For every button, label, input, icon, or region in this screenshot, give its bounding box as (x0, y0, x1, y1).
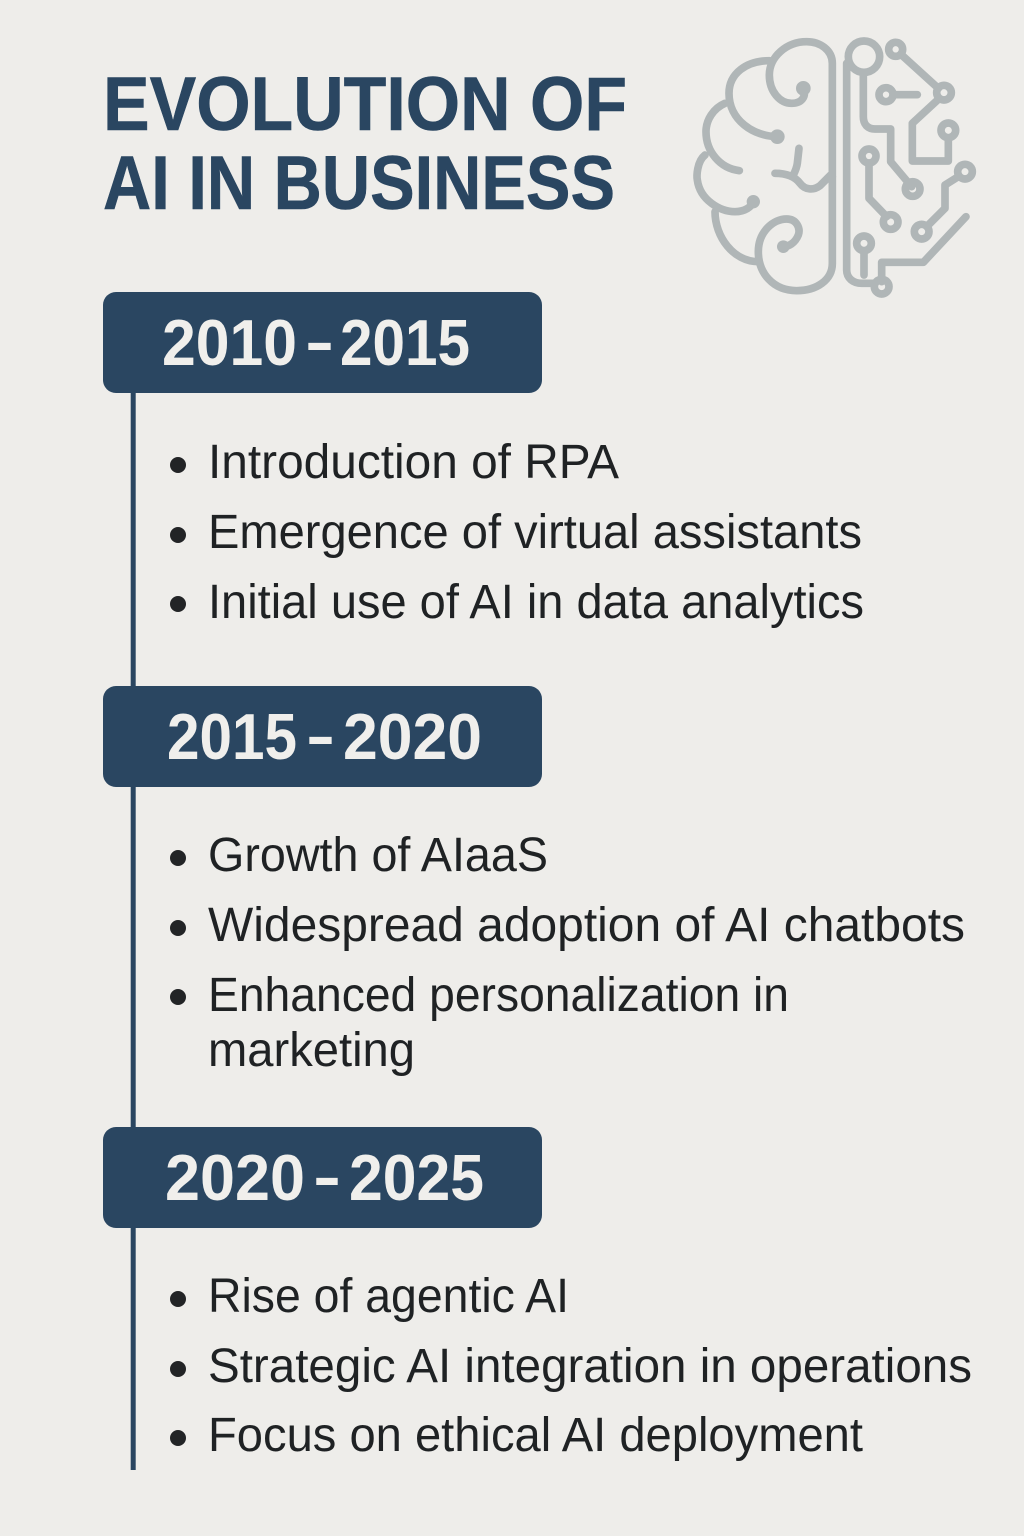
title: AI IN BUSINESS (103, 141, 615, 226)
bullet list 2020-2025 (170, 1270, 972, 1462)
title: EVOLUTION OF (103, 62, 627, 147)
period 2015-2020 header: 2020 (343, 700, 482, 773)
icon: brain and circuit (697, 41, 972, 294)
bullet list 2015-2020: Widespread adoption of AI chatbots (208, 899, 965, 952)
bullet list 2015-2020: marketing (208, 1024, 415, 1077)
period 2010-2015 header: 2015 (340, 306, 470, 379)
period 2020-2025 header: 2025 (349, 1141, 484, 1214)
period 2010-2015 header (103, 292, 542, 393)
period 2015-2020 header (103, 686, 542, 787)
bullet list 2015-2020 (170, 829, 965, 1077)
period 2015-2020 header: 2015 (167, 700, 297, 773)
bullet list 2015-2020: Enhanced personalization in (208, 969, 789, 1022)
period 2015-2020 header: – (308, 696, 333, 776)
period 2020-2025 header: 2020 (165, 1141, 305, 1214)
period 2020-2025 header (103, 1127, 542, 1228)
period 2020-2025 header: – (315, 1137, 339, 1217)
circuit right hemisphere (847, 41, 972, 294)
bullet list 2010-2015: Emergence of virtual assistants (208, 506, 862, 559)
bullet list 2010-2015 (170, 436, 864, 629)
bullet list 2010-2015: Initial use of AI in data analytics (208, 576, 864, 629)
period 2010-2015 header: – (307, 302, 332, 382)
period 2010-2015 header: 2010 (162, 306, 297, 379)
bullet list 2010-2015: Introduction of RPA (208, 436, 619, 489)
timeline line (131, 385, 136, 1470)
bullet list 2015-2020: Growth of AIaaS (208, 829, 548, 882)
title (103, 62, 627, 226)
brain left hemisphere (697, 42, 832, 291)
bullet list 2020-2025: Rise of agentic AI (208, 1270, 569, 1323)
bullet list 2020-2025: Focus on ethical AI deployment (208, 1409, 863, 1462)
bullet list 2020-2025: Strategic AI integration in operations (208, 1340, 972, 1393)
